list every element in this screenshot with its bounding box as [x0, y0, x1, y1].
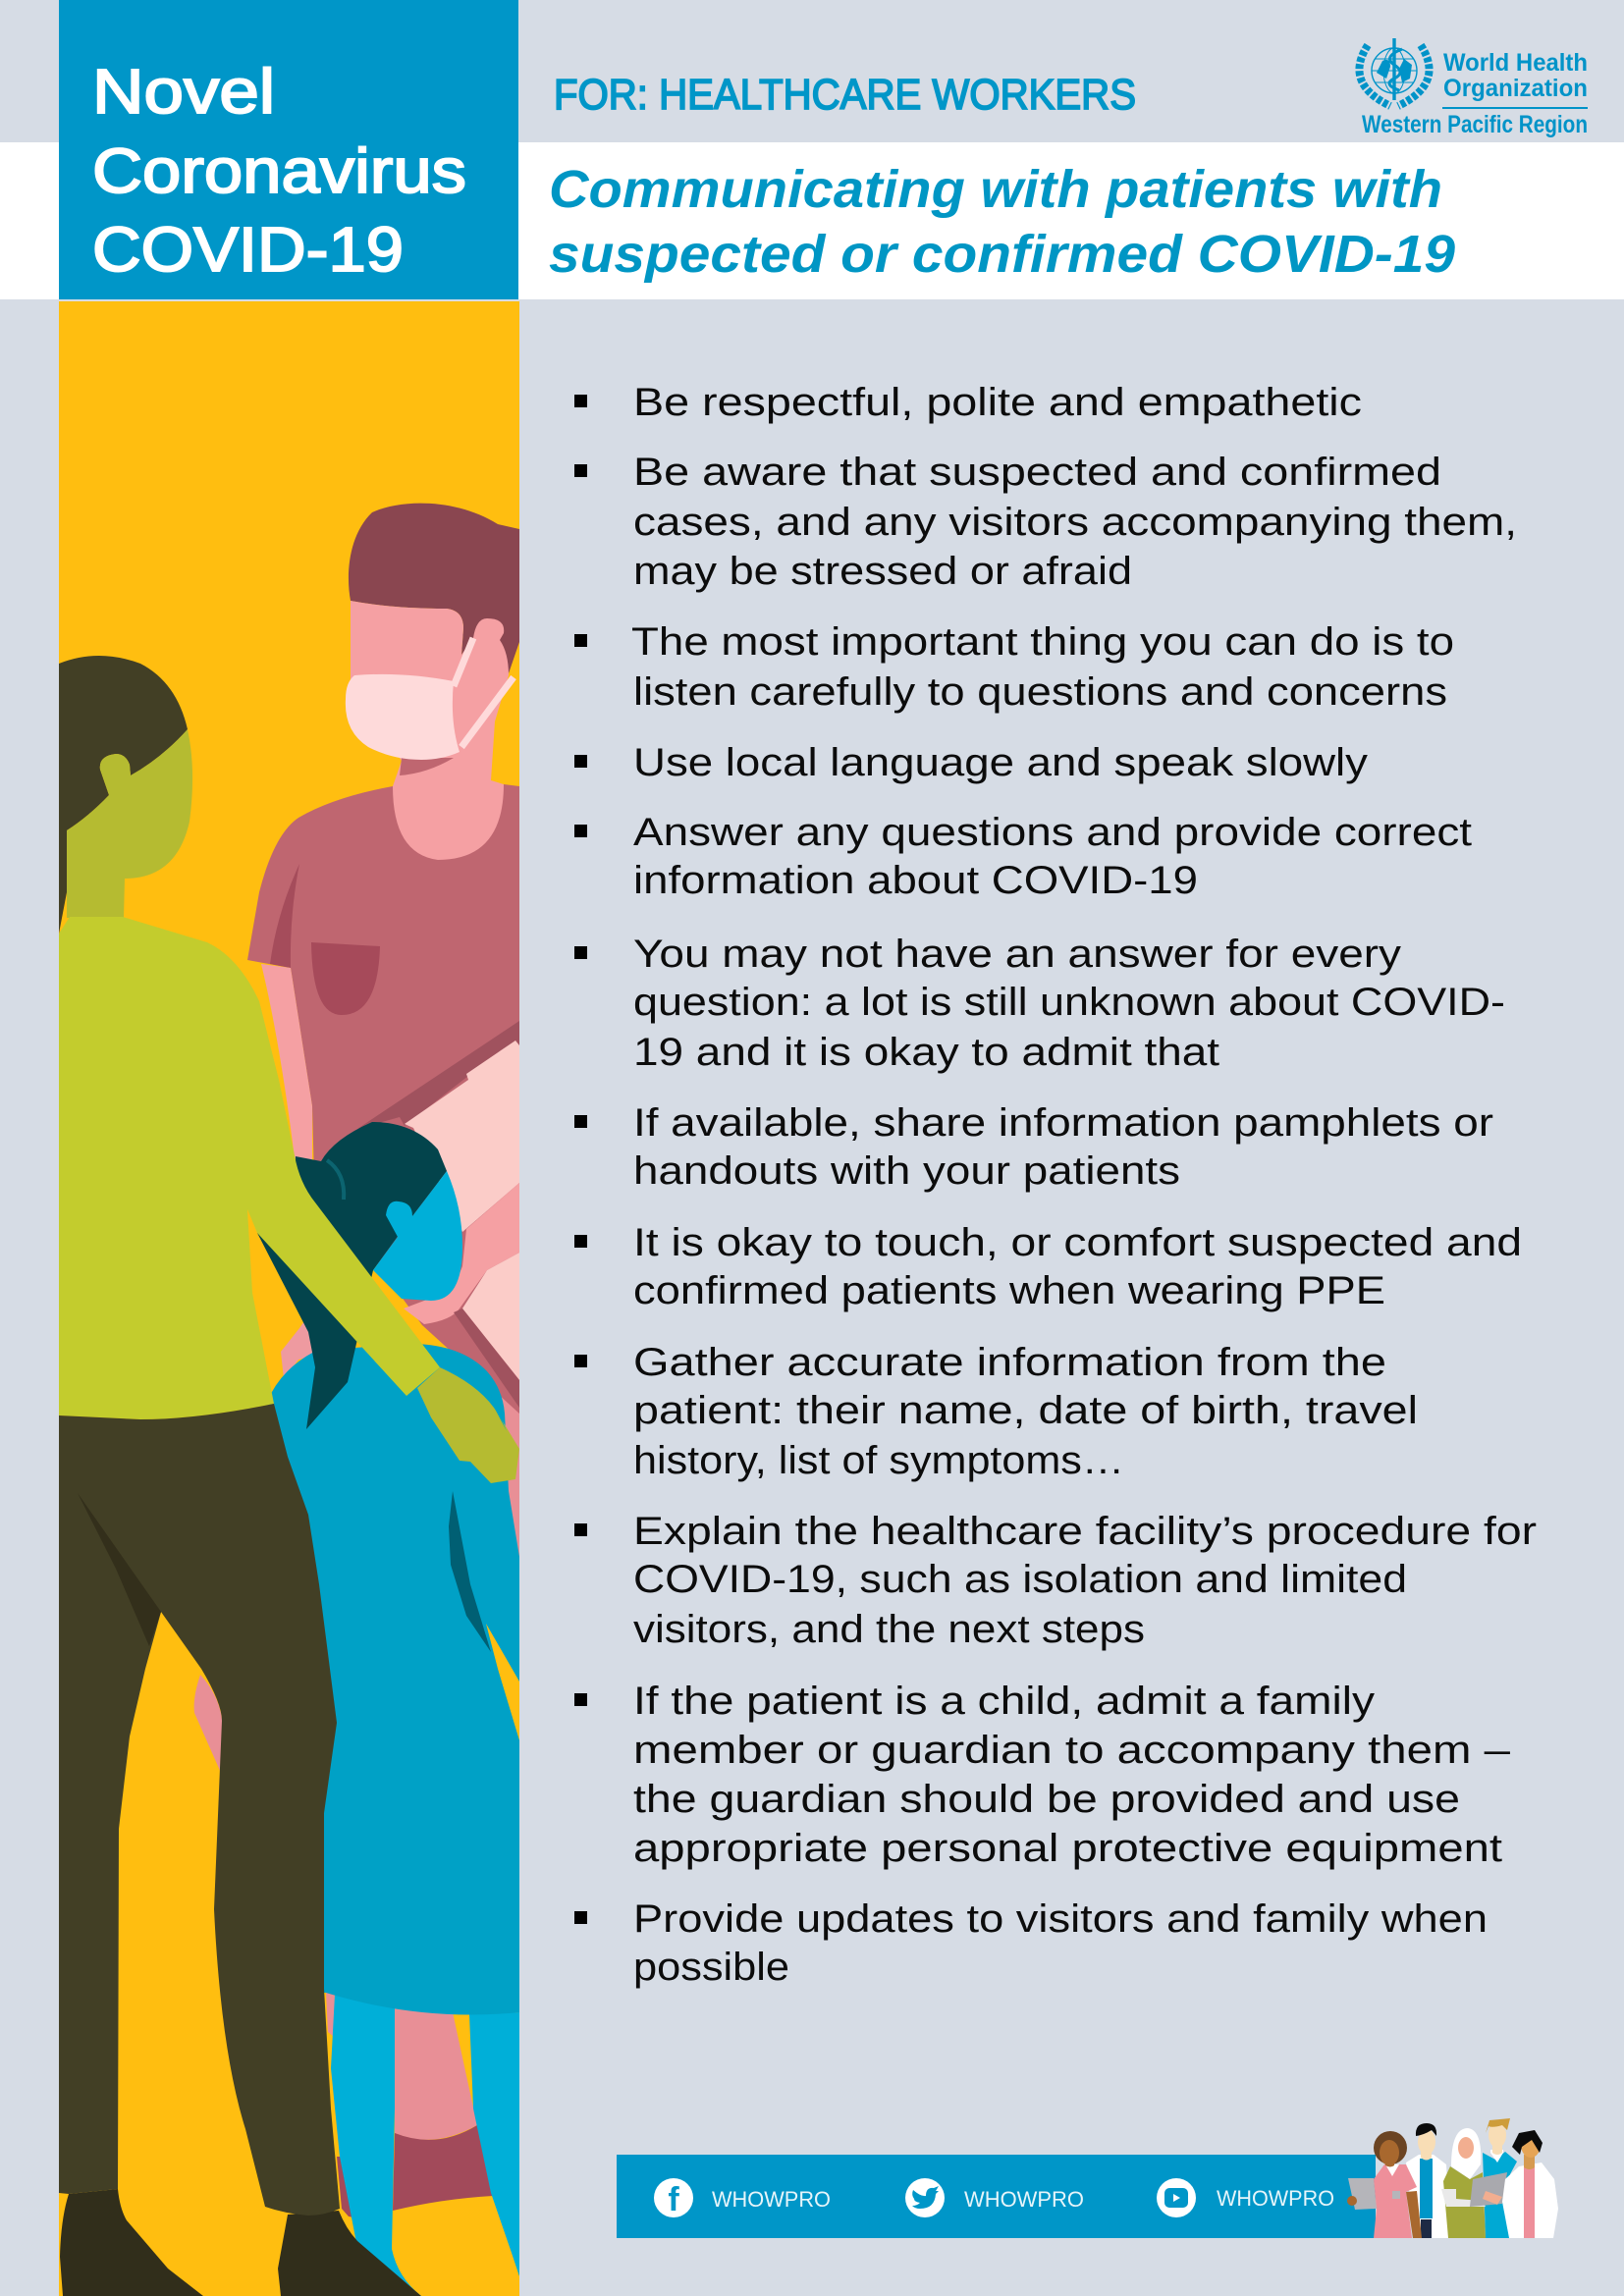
bullet: gather: history, list of symptoms…: [633, 1439, 1124, 1482]
heading: Novel Coronavirus COVID-19: Novel: [92, 56, 275, 127]
bullet: aware: Be aware that suspected and confirmed: [633, 451, 1441, 494]
bullet: gather: [574, 1341, 1418, 1482]
bullet: touch: It is okay to touch, or comfort suspected and: [633, 1221, 1522, 1264]
heading: Novel Coronavirus COVID-19: COVID-19: [92, 214, 404, 285]
bullet list: [574, 381, 1537, 1989]
bullet: unknown: You may not have an answer for every: [633, 933, 1401, 976]
youtube handle: WHOWPRO: [1217, 2186, 1334, 2211]
icon: facebook: [654, 2178, 693, 2218]
bullet: pamphlets: [574, 1101, 1493, 1193]
worker 1: pink scrubs: [1347, 2131, 1422, 2238]
audience label: FOR: HEALTHCARE WORKERS: [554, 71, 1136, 119]
illustration panel: people: [59, 301, 519, 2296]
bullet: answer: [574, 811, 1472, 902]
worker 5: doctor: [1502, 2130, 1558, 2238]
woman: [59, 656, 519, 2296]
bullet: aware: [574, 451, 1517, 593]
bullet: child: the guardian should be provided and use: [633, 1778, 1460, 1821]
icon: healthcare workers group: [1347, 2118, 1558, 2238]
bullet: unknown: 19 and it is okay to admit that: [633, 1031, 1219, 1074]
heading: Novel Coronavirus COVID-19: Coronavirus: [92, 135, 466, 206]
white title band: [0, 142, 1624, 299]
bullet: child: [574, 1680, 1511, 1870]
facebook handle: WHOWPRO: [712, 2187, 831, 2212]
icon: youtube: [1157, 2178, 1196, 2217]
WHO logo: World Health: [1443, 49, 1588, 77]
main title: Communicating with patients with: [549, 160, 1442, 219]
twitter handle: WHOWPRO: [964, 2187, 1084, 2212]
worker 3: hijab olive: [1441, 2128, 1507, 2238]
icon: facebook: f: [668, 2181, 679, 2218]
bullet: pamphlets: If available, share information pamphlets or: [633, 1101, 1493, 1145]
bullet: procedure: COVID-19, such as isolation and limited: [633, 1558, 1407, 1601]
bullet: updates: Provide updates to visitors and family when: [633, 1897, 1488, 1941]
main title: [549, 160, 1455, 284]
WHO logo: [1359, 38, 1588, 138]
bullet: aware: may be stressed or afraid: [633, 550, 1132, 593]
icon: twitter: [905, 2178, 945, 2217]
bullet: procedure: [574, 1510, 1537, 1651]
WHO logo: Organization: [1443, 75, 1588, 102]
icon: WHO emblem: [1359, 38, 1430, 106]
worker 4: blue scrubs: [1483, 2118, 1517, 2238]
heading: Novel Coronavirus COVID-19: [92, 56, 466, 285]
child: [257, 1122, 519, 2296]
bullet: child: appropriate personal protective equipment: [633, 1827, 1502, 1870]
bullet: updates: [574, 1897, 1488, 1989]
bullet: respectful: Be respectful, polite and empathetic: [633, 381, 1362, 424]
man in mask: [194, 504, 519, 2220]
bullet: gather: patient: their name, date of birth, travel: [633, 1389, 1418, 1432]
panel: blue title box: [59, 0, 518, 299]
bullet: answer: information about COVID-19: [633, 859, 1198, 902]
bullet: updates: possible: [633, 1946, 789, 1989]
bullet: child: member or guardian to accompany them –: [633, 1729, 1511, 1772]
bullet: unknown: [574, 933, 1505, 1074]
bullet: procedure: Explain the healthcare facility’s procedure for: [633, 1510, 1537, 1553]
bullet: language: Use local language and speak slowly: [633, 741, 1368, 784]
bullet: procedure: visitors, and the next steps: [633, 1608, 1145, 1651]
bullet: listen: [574, 620, 1454, 714]
footer social bar: [617, 2155, 1376, 2238]
bullet: unknown: question: a lot is still unknown about COVID-: [633, 981, 1505, 1024]
bullet: answer: Answer any questions and provide correct: [633, 811, 1472, 854]
bullet: touch: confirmed patients when wearing PPE: [633, 1269, 1385, 1312]
bullet: child: If the patient is a child, admit a family: [633, 1680, 1375, 1723]
bullet: pamphlets: handouts with your patients: [633, 1149, 1180, 1193]
bullet: listen: listen carefully to questions and concerns: [633, 670, 1447, 714]
bullet: listen: The most important thing you can do is to: [631, 620, 1454, 664]
worker 2: white coat: [1406, 2123, 1450, 2238]
bullet: aware: cases, and any visitors accompanying them,: [633, 501, 1517, 544]
main title: suspected or confirmed COVID-19: [549, 225, 1455, 284]
bullet: gather: Gather accurate information from the: [633, 1341, 1386, 1384]
bullet: touch: [574, 1221, 1522, 1312]
